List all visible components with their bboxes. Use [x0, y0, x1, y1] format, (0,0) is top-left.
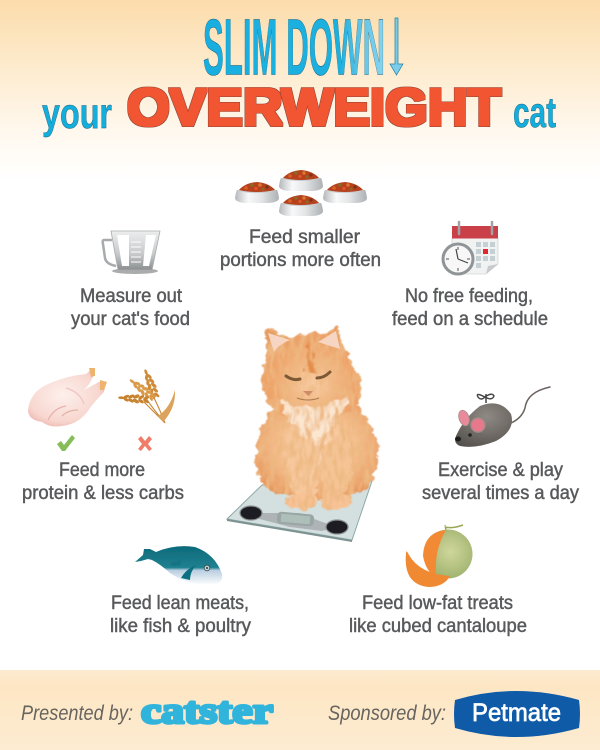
text: exercise and play: several times a day [422, 483, 579, 504]
icon: calendar and clock [442, 222, 498, 276]
text: no free feeding: No free feeding, [405, 286, 533, 307]
text: low-fat treats [349, 593, 527, 637]
logo: petmate [454, 691, 580, 737]
logo: catster: catster [141, 691, 273, 732]
text: no free feeding: feed on a schedule [392, 309, 548, 330]
text: exercise and play: Exercise & play [438, 460, 563, 481]
icon: green check [57, 435, 75, 451]
cat body and head [256, 325, 378, 500]
text: protein and carbs: Feed more [59, 460, 145, 481]
text: lean meats: like fish & poultry [110, 616, 251, 637]
text: protein and carbs: protein & less carbs [22, 483, 184, 504]
cat face [286, 372, 330, 400]
icon: four food bowls [235, 170, 367, 216]
footer band [0, 670, 600, 750]
icon: toy mouse [455, 387, 550, 447]
icon: raw chicken [28, 368, 107, 426]
icon: cantaloupe [406, 525, 472, 587]
cat ears [268, 331, 340, 352]
text: protein and carbs [22, 460, 184, 504]
text: lean meats [110, 593, 251, 637]
scale [227, 481, 372, 542]
icon: down arrow [390, 18, 403, 75]
title word: your: your [42, 90, 112, 138]
text: no free feeding [392, 286, 548, 330]
text: lean meats: Feed lean meats, [111, 593, 249, 614]
cat paws [287, 493, 352, 510]
text: feed smaller portions [220, 227, 381, 271]
illustration: cat on scale [227, 325, 378, 542]
text: sponsored by: Sponsored by: [328, 702, 446, 725]
icon: wheat [118, 367, 175, 423]
title word: cat: cat [513, 89, 556, 137]
text: feed smaller portions: Feed smaller [249, 227, 361, 248]
title word: overweight: OVERWEIGHT [127, 79, 501, 137]
title [42, 2, 556, 138]
header background [0, 0, 600, 180]
icon: measuring jug [103, 231, 160, 274]
text: feed smaller portions: portions more often [220, 250, 381, 271]
text: measure out food [71, 286, 190, 330]
logo: petmate: Petmate [472, 699, 561, 727]
text: measure out food: your cat's food [71, 309, 190, 330]
icon: red cross [138, 436, 152, 451]
text: presented by: Presented by: [21, 702, 133, 725]
text: measure out food: Measure out [80, 286, 183, 307]
text: low-fat treats: Feed low-fat treats [362, 593, 513, 614]
text: low-fat treats: like cubed cantaloupe [349, 616, 527, 637]
icon: fish [135, 546, 222, 585]
text: exercise and play [422, 460, 579, 504]
